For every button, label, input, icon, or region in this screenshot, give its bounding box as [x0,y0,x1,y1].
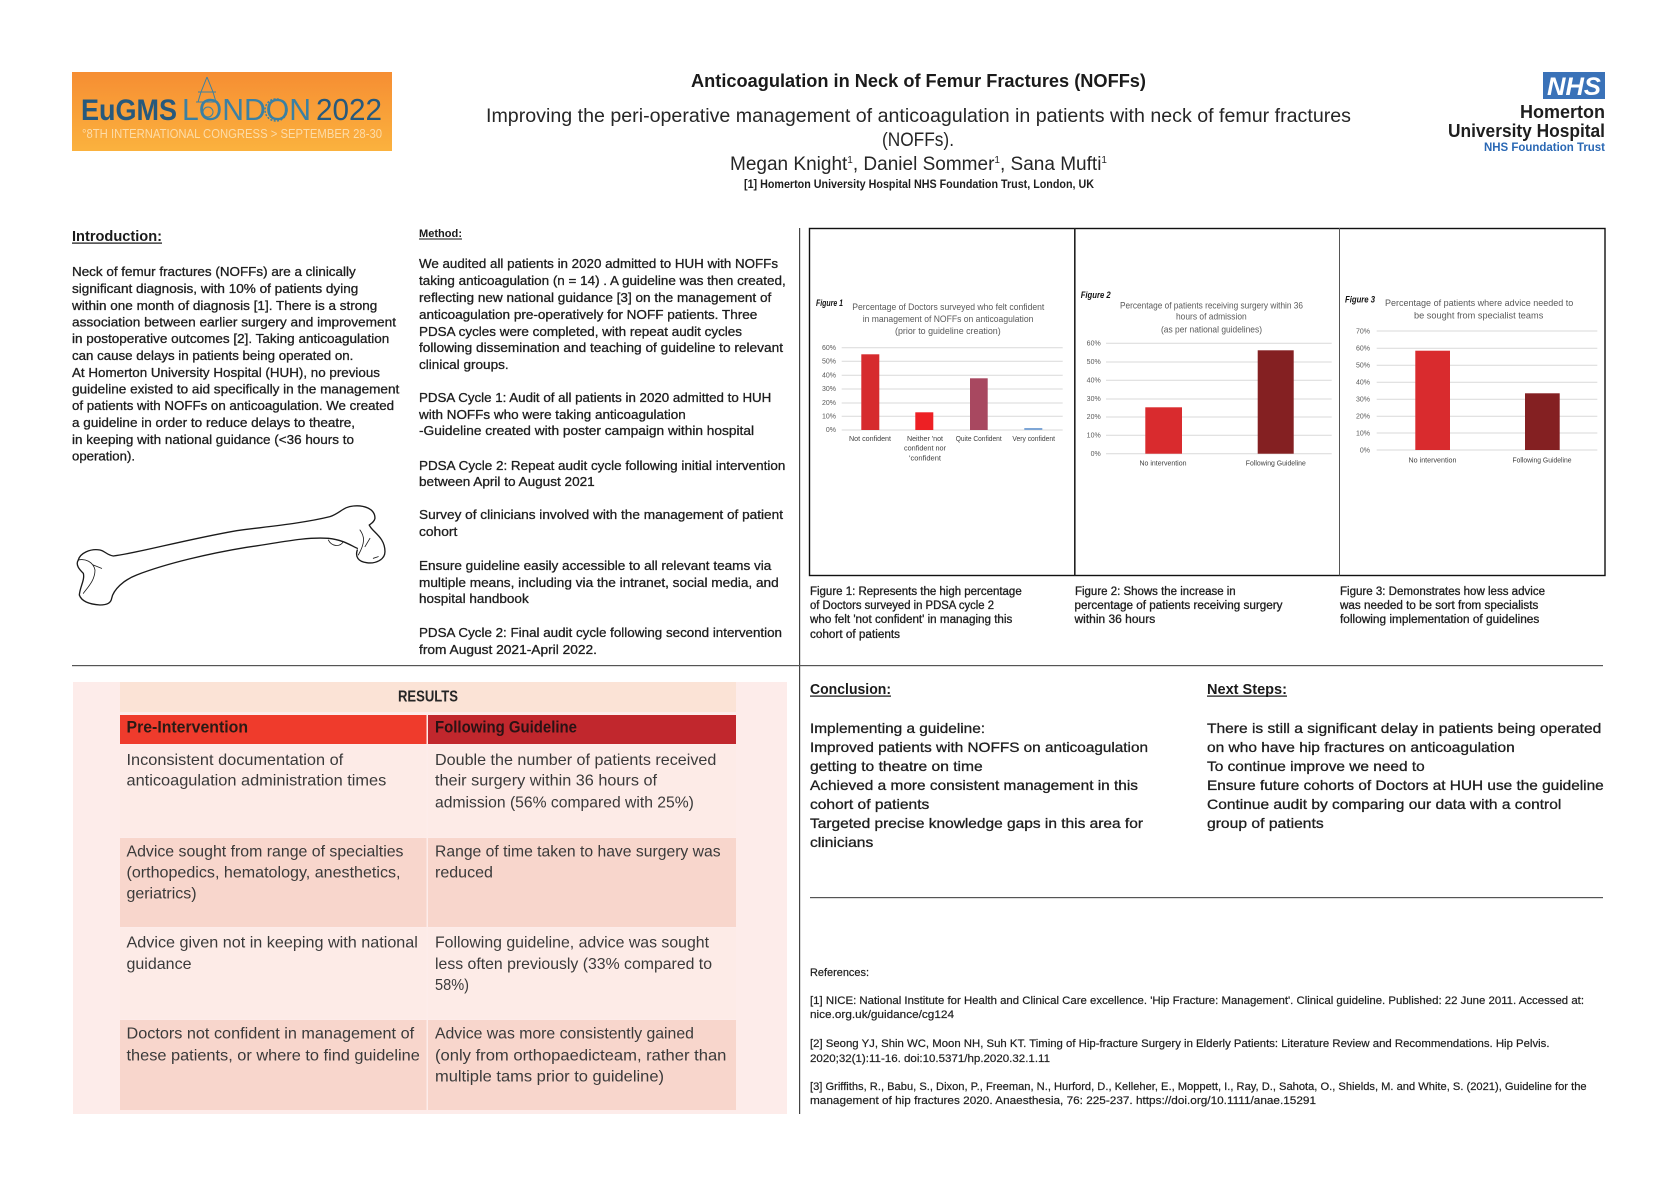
introduction text: guideline existed to aid specifically in the management [72,382,400,396]
authors: 1 [1101,155,1107,166]
introduction text: Neck of femur fractures (NOFFs) are a clinically [72,264,356,279]
method text: from August 2021-April 2022. [419,642,597,657]
chart: figure 1: 60% [822,345,836,352]
chart: figure 3: No intervention [1408,457,1457,464]
method text: Survey of clinicians involved with the management of patient [419,507,783,522]
caption: figure 1: of Doctors surveyed in PDSA cycle 2 [810,600,994,612]
logo: EuGMS London 2022: EuGMS [81,94,177,127]
table header: pre-intervention: Pre-Intervention [126,719,248,737]
method text: with NOFFs who were taking anticoagulation [418,407,686,422]
chart: figure 1: in management of NOFFs on anticoagulation [863,314,1033,325]
references: [1] NICE: National Institute for Health and Clinical Care excellence. 'Hip Fracture: Management'. Clinical guideline. Published: 22 June 2011. Accessed at: [810,995,1584,1007]
table text: pre-intervention column: Inconsistent documentation of [126,752,344,769]
authors: , Sana Mufti [1000,154,1101,175]
table header: pre-intervention [120,715,426,744]
table text: following guideline column: Following guideline, advice was sought [435,934,710,951]
chart: figure 1: Very confident [1012,436,1055,443]
chart: figure 1: 40% [822,372,836,380]
chart: figure 1: Neither 'not [907,436,943,443]
chart: figure 3 [1345,294,1597,464]
chart: figure 1: Percentage of Doctors surveyed who felt confident [852,302,1045,313]
table text: pre-intervention column: anticoagulation administration times [126,773,386,790]
next steps text: Continue audit by comparing our data with a control [1207,796,1561,812]
chart: figure 1: Quite Confident [956,436,1002,443]
method text: PDSA cycles were completed, with repeat audit cycles [419,324,743,339]
logo: NHS Homerton: NHS Foundation Trust [1484,140,1605,154]
subtitle: Improving the peri-operative management of anticoagulation in patients with neck of femur fractures [486,106,1351,127]
logo: EuGMS London 2022: 2022 [316,92,382,127]
subtitle [486,106,1351,151]
chart: figure 1: 'confident [909,456,941,462]
chart: figure 2: 20% [1087,414,1101,421]
chart: figure 2 [1081,290,1332,468]
introduction text: of patients with NOFFs on anticoagulation. We created [72,398,394,413]
caption: figure 3: Figure 3: Demonstrates how less advice [1340,586,1545,598]
chart: figure 2: Following Guideline [1246,461,1306,468]
table text: pre-intervention column: guidance [126,956,192,973]
caption: figure 1: Figure 1: Represents the high percentage [810,586,1022,598]
method text: taking anticoagulation (n = 14) . A guideline was then created, [419,273,786,288]
results heading: RESULTS [398,689,458,706]
results heading [120,682,736,712]
method text: hospital handbook [419,591,529,606]
references [810,967,1587,1107]
method text: clinical groups. [419,357,509,372]
caption: figure 2: within 36 hours [1073,614,1155,626]
caption: figure 3 [1339,586,1545,626]
method text: anticoagulation pre-operatively for NOFF patients. Three [419,307,757,322]
logo: EuGMS London 2022: LONDON [182,92,311,127]
method text: reflecting new national guidance [3] on the management of [419,290,772,305]
chart: figure 2: 50% [1087,359,1101,366]
method text [418,256,786,657]
conclusion text: Targeted precise knowledge gaps in this area for [810,815,1143,831]
caption: figure 3: was needed to be sort from specialists [1339,600,1539,612]
next steps text: To continue improve we need to [1207,758,1425,774]
references: [3] Griffiths, R., Babu, S., Dixon, P., Freeman, N., Hurford, D., Kelleher, E., Moppett, I., Ray, D., Sahota, O., Shields, M. and White, S. (2021), Guideline for the [810,1081,1587,1093]
chart: figure 2: 60% [1087,340,1101,348]
chart: figure 1: Figure 1 [816,298,843,308]
next steps text: on who have hip fractures on anticoagulation [1207,739,1515,755]
title block [486,71,1351,191]
method text: PDSA Cycle 2: Repeat audit cycle following initial intervention [419,458,785,473]
table text: pre-intervention column [126,752,420,1065]
table text: following guideline column: multiple tams prior to guideline) [435,1069,664,1086]
caption: figure 3: following implementation of guidelines [1340,614,1540,626]
chart: figure 1: Not confident [849,436,891,443]
conclusion text: cohort of patients [810,796,929,812]
table text: pre-intervention column: (orthopedics, hematology, anesthetics, [126,864,400,881]
introduction text: can cause delays in patients being operated on. [72,348,353,363]
table text: following guideline column: their surgery within 36 hours of [435,773,658,790]
caption: figure 2 [1073,586,1283,626]
panel: conclusion [810,682,1148,850]
chart: figure 3: Following Guideline [1512,457,1572,464]
method text: -Guideline created with poster campaign within hospital [419,423,754,438]
panel: method [418,228,786,657]
table header: following guideline: Following Guideline [435,719,577,737]
chart: figure 3: 70% [1356,328,1370,336]
logo: EuGMS London 2022: °8TH INTERNATIONAL CONGRESS > SEPTEMBER 28-30 [82,126,382,141]
chart: figure 2: 0% [1091,451,1101,458]
table text: following guideline column: admission (56% compared with 25%) [435,795,694,812]
table text: following guideline column: Advice was more consistently gained [435,1026,694,1043]
method text: between April to August 2021 [419,474,595,489]
logo: NHS Homerton: NHS [1547,73,1601,101]
references: 2020;32(1):11-16. doi:10.5371/hp.2020.32.1.11 [810,1053,1050,1065]
chart: figure 2: Percentage of patients receiving surgery within 36 [1120,301,1303,312]
authors: 1 [994,155,1000,166]
table text: following guideline column: less often previously (33% compared to [435,956,712,973]
table text: pre-intervention column: Advice given not in keeping with national [126,934,418,951]
authors: Megan Knight [730,154,847,175]
logo: EuGMS London 2022 [72,72,392,151]
chart: figure 3: 30% [1356,396,1370,404]
method text: PDSA Cycle 1: Audit of all patients in 2020 admitted to HUH [419,390,771,405]
caption: figure 1: cohort of patients [810,629,900,641]
table text: pre-intervention column: Doctors not confident in management of [126,1026,415,1043]
table text: following guideline column: Double the number of patients received [435,752,716,769]
title: Anticoagulation in Neck of Femur Fractures (NOFFs) [691,71,1146,91]
chart: figure 2: 10% [1087,432,1101,440]
introduction text: in postoperative outcomes [2]. Taking anticoagulation [72,331,389,346]
chart: figure 1 [816,298,1063,462]
next steps text: group of patients [1207,815,1324,831]
chart: figure 1: 30% [822,386,836,393]
icon: femur bone drawing [77,506,385,605]
figure captions [809,586,1545,641]
caption: figure 1 [809,586,1022,641]
chart: figure 2: No intervention [1140,461,1187,468]
introduction text: association between earlier surgery and improvement [72,314,396,330]
chart: figure 3: 60% [1356,346,1370,352]
table header: following guideline [428,715,736,744]
table text: following guideline column: reduced [435,864,493,881]
table text: following guideline column [435,752,726,1086]
references: management of hip fractures 2020. Anaesthesia, 76: 225-237. https://doi.org/10.1111/anae.15291 [810,1095,1316,1107]
conclusion text: Implementing a guideline: [810,720,985,736]
introduction text: a guideline in order to reduce delays to theatre, [72,415,355,430]
table text: pre-intervention column: Advice sought from range of specialties [126,844,404,861]
references: [2] Seong YJ, Shin WC, Moon NH, Suh KT. Timing of Hip-fracture Surgery in Elderly Patients: Literature Review and Recommendations. Hip Pelvis. [810,1038,1550,1050]
panel: results table [73,682,787,1114]
references: References: [810,967,869,979]
chart: figure 2: (as per national guidelines) [1161,325,1262,336]
chart: figure 1: 10% [822,414,836,420]
method text: following dissemination and teaching of guideline to relevant [419,340,783,355]
introduction text: At Homerton University Hospital (HUH), no previous [72,365,381,380]
chart: figure 3: 10% [1356,430,1370,438]
table text: pre-intervention column: geriatrics) [126,885,196,902]
caption: figure 2: percentage of patients receiving surgery [1074,600,1283,612]
heading: method: Method: [419,228,462,240]
logo: NHS Homerton: University Hospital [1448,121,1605,141]
conclusion text: getting to theatre on time [810,758,983,774]
conclusion text [810,720,1148,850]
chart: figure 1: (prior to guideline creation) [895,326,1001,337]
logo: NHS Homerton: Homerton [1520,102,1605,122]
authors: , Daniel Sommer [853,154,995,175]
next steps text: There is still a significant delay in patients being operated [1207,720,1601,736]
next steps text: Ensure future cohorts of Doctors at HUH use the guideline [1207,777,1604,793]
affiliation: [1] Homerton University Hospital NHS Foundation Trust, London, UK [744,177,1094,191]
chart: figure 3: 40% [1356,380,1370,386]
introduction text [71,264,400,464]
chart: figure 2: Figure 2 [1081,290,1111,300]
method text: Ensure guideline easily accessible to all relevant teams via [419,558,772,573]
conclusion text: Achieved a more consistent management in this [810,777,1138,793]
panel: next steps [1207,682,1604,831]
next steps text [1207,720,1604,831]
introduction text: in keeping with national guidance (<36 hours to [72,432,354,447]
table text: following guideline column: (only from orthopaedicteam, rather than [435,1048,726,1065]
table text: pre-intervention column: these patients, or where to find guideline [126,1048,420,1065]
chart: figure 3: Percentage of patients where advice needed to [1385,298,1573,309]
heading: introduction: Introduction: [72,228,162,245]
chart: figure 3: 0% [1360,448,1370,454]
panel: introduction [71,228,400,464]
panel: figures frame [810,228,1605,576]
method text: multiple means, including via the intranet, social media, and [419,575,779,590]
method text: We audited all patients in 2020 admitted to HUH with NOFFs [419,256,779,271]
chart: figure 2: 40% [1087,378,1101,384]
chart: figure 3: Figure 3 [1345,294,1375,304]
chart: figure 2: 30% [1087,396,1101,403]
chart: figure 1: 0% [826,427,836,434]
heading: next steps: Next Steps: [1207,682,1287,698]
caption: figure 2: Figure 2: Shows the increase in [1075,586,1236,598]
subtitle: (NOFFs). [882,130,954,151]
chart: figure 1: 20% [822,400,836,407]
chart: figure 2: hours of admission [1176,312,1247,323]
caption: figure 1: who felt 'not confident' in managing this [809,614,1013,626]
heading: conclusion: Conclusion: [810,682,891,698]
table text: following guideline column: 58%) [435,977,469,994]
chart: figure 3: 50% [1356,362,1370,370]
method text: PDSA Cycle 2: Final audit cycle following second intervention [419,625,782,640]
introduction text: operation). [72,448,135,464]
table text: following guideline column: Range of time taken to have surgery was [435,844,721,861]
introduction text: within one month of diagnosis [1]. There is a strong [71,298,377,313]
conclusion text: clinicians [810,834,873,850]
chart: figure 3: be sought from specialist teams [1414,311,1544,322]
conclusion text: Improved patients with NOFFS on anticoagulation [810,739,1148,755]
chart: figure 1: 50% [822,358,836,366]
logo: NHS Homerton [1448,72,1605,154]
introduction text: significant diagnosis, with 10% of patients dying [72,281,358,296]
method text: cohort [419,524,458,539]
authors: 1 [847,155,853,166]
chart: figure 3: 20% [1356,414,1370,420]
references: nice.org.uk/guidance/cg124 [810,1009,954,1021]
chart: figure 1: confident nor [904,446,947,452]
